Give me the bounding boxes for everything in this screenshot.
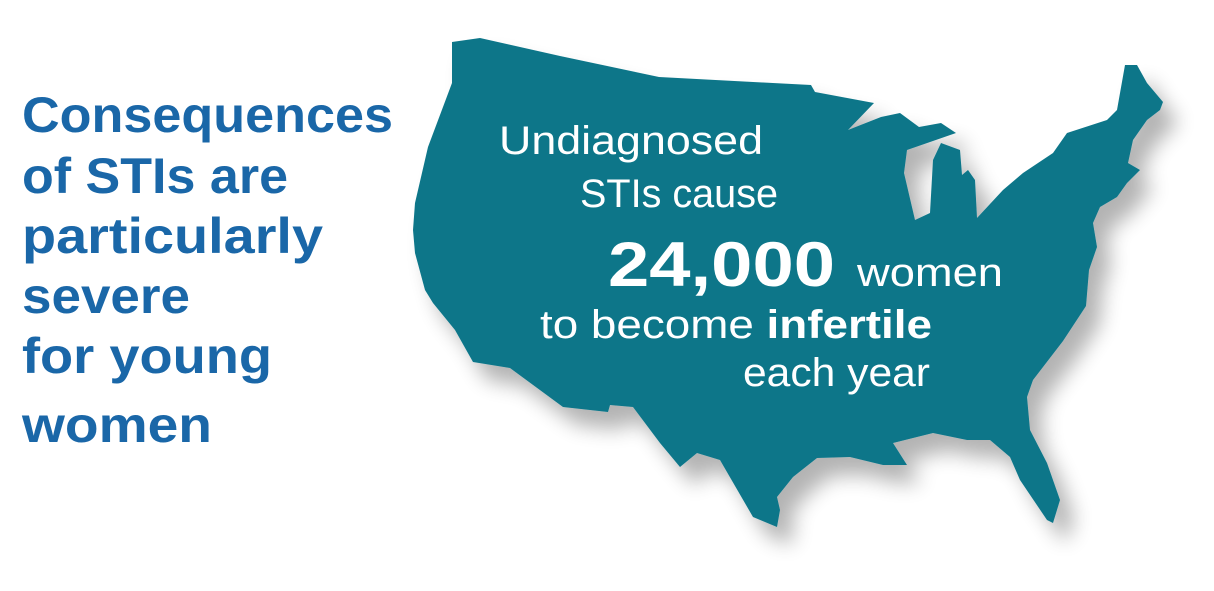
map text: each year bbox=[743, 351, 930, 395]
statistic: 24,000 bbox=[608, 230, 835, 300]
map text: Undiagnosed bbox=[499, 119, 763, 163]
map text: STIs cause bbox=[580, 172, 778, 216]
map: United States bbox=[413, 38, 1163, 527]
title: particularly bbox=[22, 208, 323, 264]
map text: to become infertile bbox=[540, 303, 932, 347]
map text bbox=[499, 119, 1003, 395]
map text: women bbox=[856, 251, 1003, 295]
title: severe bbox=[22, 268, 190, 324]
title: Consequences bbox=[22, 87, 393, 143]
title: women bbox=[21, 397, 212, 453]
title bbox=[21, 87, 393, 453]
title: of STIs are bbox=[22, 148, 288, 204]
title: for young bbox=[22, 328, 272, 384]
